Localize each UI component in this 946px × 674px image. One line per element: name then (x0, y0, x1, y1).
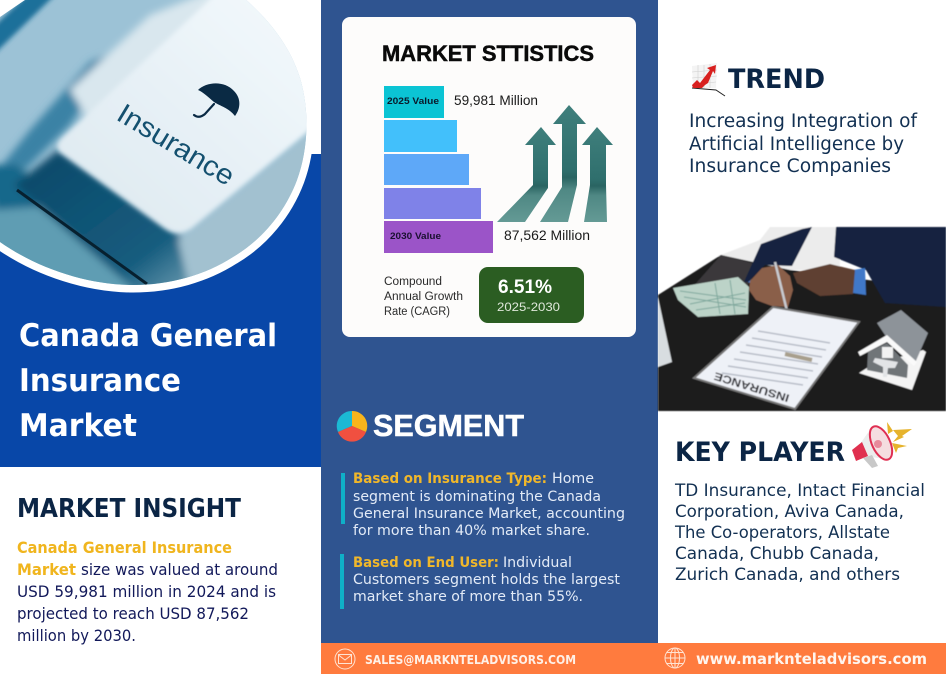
text block: end user segment (340, 554, 620, 609)
heading: market statistics: MARKET STTISTICS (382, 41, 594, 66)
text block: key players list: The Co-operators, Allstate (674, 523, 890, 543)
text block: market insight paragraph: million by 2030. (17, 626, 136, 645)
text block: insurance type segment: segment is dominating the Canada (353, 489, 601, 505)
heading: market insight: MARKET INSIGHT (17, 494, 241, 524)
text block: key players list: Zurich Canada, and others (675, 565, 900, 585)
chart: stepped bars (384, 86, 493, 253)
title: Canada General Insurance Market: Insurance (19, 363, 181, 399)
heading: trend: TREND (728, 64, 825, 95)
text block: market insight paragraph: projected to reach USD 87,562 (17, 604, 249, 623)
panel: market statistics card (342, 17, 636, 337)
text block: key players list (674, 481, 925, 585)
text block: trend description: Insurance Companies (689, 156, 891, 177)
label: CAGR description: Compound (384, 276, 442, 288)
icon: trend chart (692, 63, 725, 96)
text block: key players list: Corporation, Aviva Canada, (675, 502, 904, 522)
text block: end user segment: Customers segment holds the largest (353, 572, 620, 588)
text block: insurance type segment: Home (552, 471, 594, 487)
label: CAGR description: Annual Growth (384, 291, 463, 303)
icon: three growth arrows (497, 105, 613, 222)
text block: key players list: TD Insurance, Intact Financial (674, 481, 925, 501)
footer: contact bar (321, 643, 946, 674)
text block: end user segment: market share of more than 55%. (353, 589, 583, 605)
chart: stepped bars: 2025 Value (387, 96, 439, 107)
label: 2025 value: 59,981 Million (454, 93, 538, 108)
key label text: Insurance (112, 98, 240, 192)
text block: market insight paragraph: Canada General Insurance (17, 538, 232, 557)
callout: CAGR value: 2025-2030 (497, 300, 560, 314)
panel: middle segment background (321, 0, 658, 643)
contact: website: www.marknteladvisors.com (696, 650, 927, 668)
icon: globe (665, 648, 685, 668)
heading: segment: SEGMENT (373, 408, 524, 443)
text block: trend description: Increasing Integration of (689, 111, 917, 132)
text block: market insight paragraph: USD 59,981 million in 2024 and is (17, 582, 276, 601)
text block: end user segment: Based on End User: (353, 555, 499, 571)
text block: insurance type segment: General Insurance Market, accounting (353, 506, 625, 522)
text block: insurance type segment: for more than 40% market share. (353, 523, 590, 539)
title: Canada General Insurance Market (19, 318, 277, 444)
label: CAGR description: Rate (CAGR) (384, 306, 450, 318)
icon: megaphone (852, 422, 912, 468)
icon: email envelope (335, 649, 355, 669)
contact: email address: SALES@MARKNTELADVISORS.COM (365, 653, 576, 667)
text block: market insight paragraph: Market (17, 560, 76, 579)
text block: insurance type segment (341, 471, 625, 539)
label: CAGR description (384, 276, 463, 318)
callout: CAGR value: 6.51% (498, 277, 552, 298)
heading: key player: KEY PLAYER (675, 437, 845, 468)
chart: stepped bars: 2030 Value (390, 231, 441, 242)
icon: umbrella on key (194, 83, 239, 117)
text block: key players list: Canada, Chubb Canada, (675, 544, 879, 564)
title: Canada General Insurance Market: Market (19, 408, 137, 444)
title: Canada General Insurance Market: Canada General (19, 318, 277, 354)
label: 2030 value: 87,562 Million (504, 228, 590, 243)
text block: trend description (689, 111, 917, 177)
icon: segment pie chart (337, 411, 367, 442)
text block: trend description: Artificial Intelligence by (689, 134, 904, 155)
text block: insurance type segment: Based on Insurance Type: (353, 471, 547, 487)
photo label: INSURANCE on document: INSURANCE (713, 369, 791, 404)
panel: left hero blue background (0, 154, 321, 467)
text block: market insight paragraph (17, 538, 278, 645)
photo: insurance keyboard key in circle (0, 0, 325, 295)
photo: signing insurance document (658, 227, 946, 411)
text block: market insight paragraph: size was valued at around (81, 560, 278, 579)
text block: end user segment: Individual (503, 555, 572, 571)
callout: CAGR value (479, 267, 584, 323)
